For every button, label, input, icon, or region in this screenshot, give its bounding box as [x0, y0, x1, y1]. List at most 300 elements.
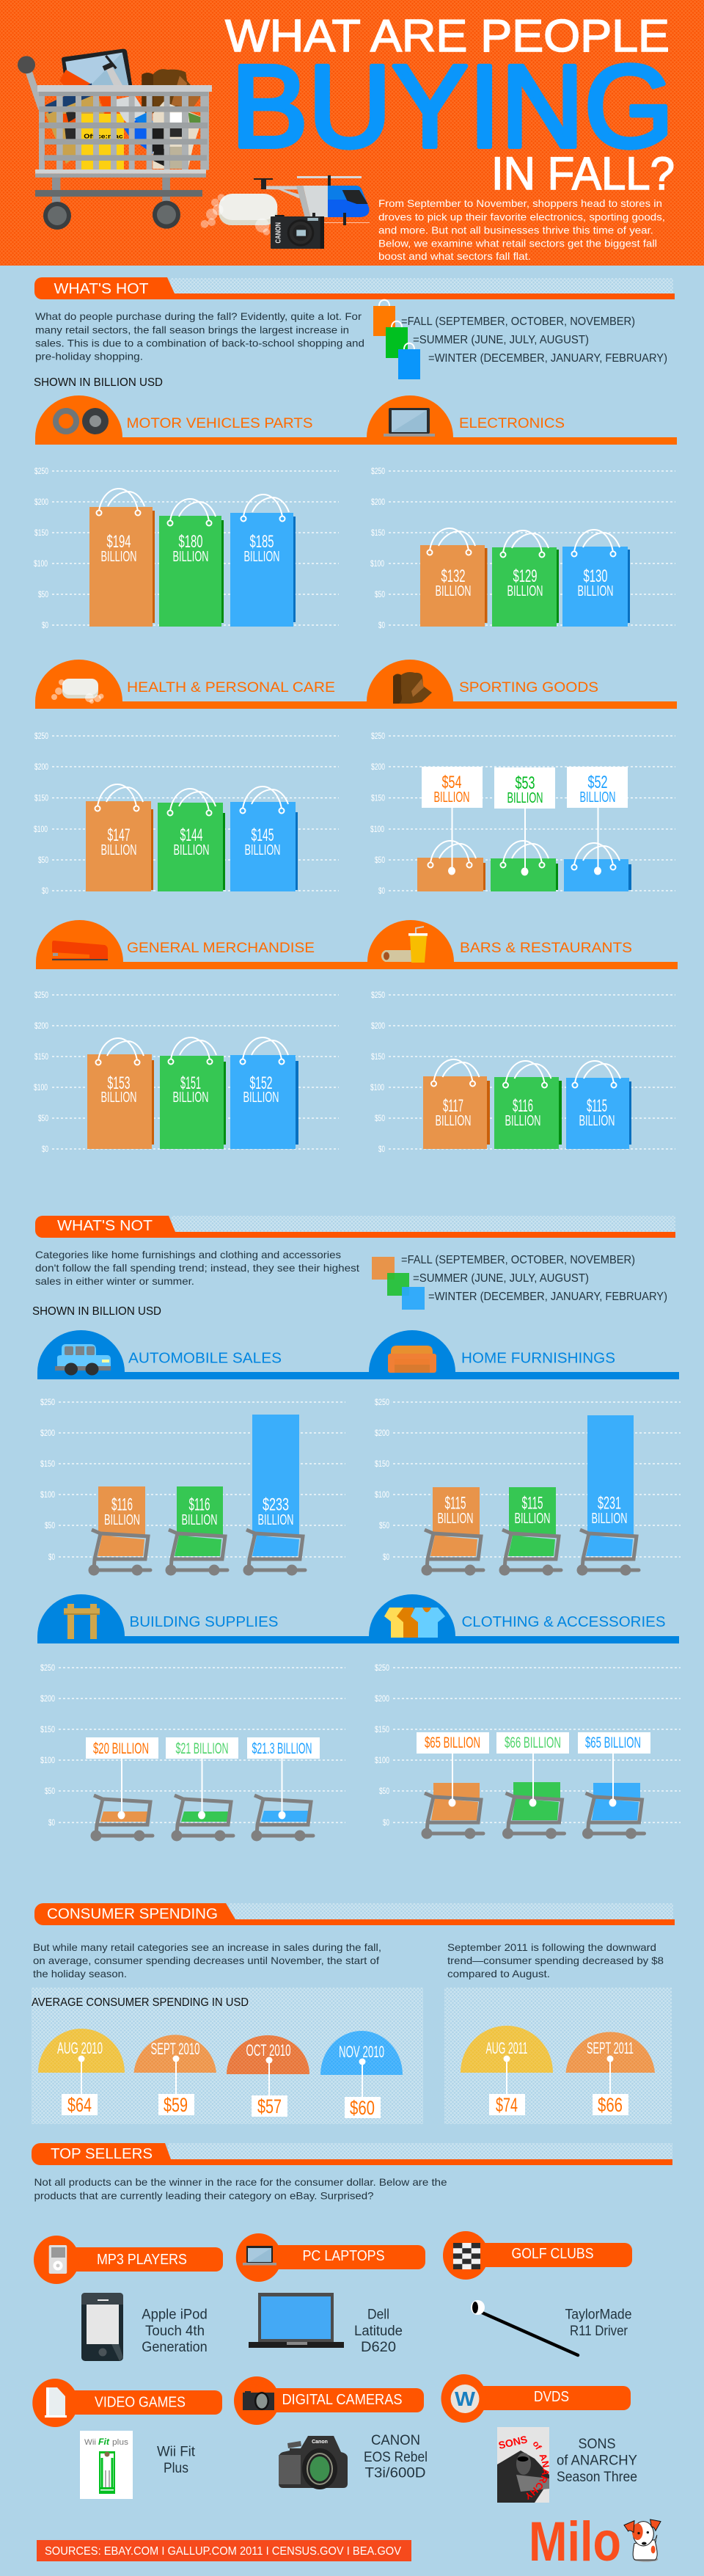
chart: electronics: $50: [375, 589, 385, 599]
chart: general merchandise: $50: [38, 1113, 48, 1123]
dome: nov 2010: NOV 2010: [339, 2043, 384, 2061]
bag: winter: $115: [587, 1096, 607, 1116]
what's not intro text: Categories like home furnishings and clothing and accessories: [35, 1249, 341, 1260]
title: what are people: WHAT ARE PEOPLE: [225, 11, 670, 62]
pill: digital cameras: DIGITAL CAMERAS: [282, 2392, 402, 2408]
top sellers intro text: products that are currently leading their category on eBay. Surprised?: [34, 2189, 374, 2201]
callout: $52 billion: [567, 767, 628, 875]
icon: stapler: [52, 941, 108, 960]
bag: fall: $132: [441, 566, 465, 586]
chart: health and personal care: $250: [34, 731, 48, 741]
dome: oct 2010: OCT 2010: [246, 2041, 290, 2059]
callout: $54 billion: BILLION: [434, 789, 469, 806]
pill: mp3 players: [34, 2236, 223, 2284]
sources bar: [37, 2540, 411, 2561]
callout: $52 billion: BILLION: [579, 789, 616, 806]
pill: video games: [32, 2379, 222, 2427]
icon: gear and tire: [54, 408, 109, 434]
what's not intro text: don't follow the fall spending trend; instead, they see their highest: [35, 1262, 359, 1274]
chart: home furnishings: $150: [375, 1459, 389, 1469]
icon: soap: [51, 679, 104, 704]
chart: clothing and accessories: $100: [375, 1755, 389, 1765]
chart: sporting goods: $250: [371, 731, 385, 741]
category band row 4: [37, 1330, 679, 1379]
consumer spending text left: the holiday season.: [33, 1968, 127, 1980]
category band row 1: [35, 395, 677, 445]
cart: winter: $65 BILLION: [585, 1734, 641, 1751]
bag: winter: $130: [584, 566, 607, 586]
product: taylormade driver: TaylorMade: [565, 2307, 632, 2323]
product: dell latitude: Latitude: [354, 2324, 403, 2339]
product: canon eos rebel: CANON: [371, 2433, 420, 2448]
bag: winter: [564, 843, 631, 891]
product: wii fit plus: Wii: [84, 2438, 96, 2447]
bag: fall: BILLION: [101, 549, 136, 565]
cart: fall: [88, 1486, 150, 1576]
product: canon eos rebel: Canon: [312, 2440, 328, 2445]
legend: seasons with squares: =SUMMER (JUNE, JULY, AUGUST): [413, 1272, 589, 1285]
logo: milo wordmark: Milo: [529, 2511, 621, 2573]
bag: winter: [230, 787, 298, 891]
chart: building supplies: $150: [40, 1724, 55, 1734]
caption: shown in billion usd: SHOWN IN BILLION USD: [32, 1305, 161, 1318]
chart: health and personal care: $50: [38, 855, 48, 865]
dome: aug 2011: [461, 2026, 553, 2116]
bag: winter: [230, 1037, 298, 1149]
bag: fall: [417, 841, 485, 891]
what's hot intro text: What do people purchase during the fall? Evidently, quite a lot. For: [35, 310, 362, 322]
callout: $54 billion: [422, 767, 483, 875]
product: ipod touch: [81, 2293, 208, 2361]
chart: home furnishings: $200: [375, 1428, 389, 1438]
callout: $53 billion: BILLION: [507, 790, 543, 806]
chart: clothing and accessories: $250: [375, 1663, 389, 1673]
cart: summer: BILLION: [515, 1511, 550, 1527]
legend: seasons with bags: =FALL (SEPTEMBER, OCTOBER, NOVEMBER): [401, 315, 635, 328]
section banner: what's not: WHAT'S NOT: [57, 1218, 153, 1234]
section banner: what's hot: WHAT'S HOT: [54, 281, 148, 297]
heading: health and personal care: HEALTH & PERSONAL CARE: [127, 680, 335, 696]
bag: fall: $153: [107, 1073, 131, 1093]
chart: home furnishings: $50: [379, 1520, 389, 1530]
chart: bars and restaurants: $200: [371, 1021, 385, 1031]
chart: general merchandise: $250: [34, 990, 48, 1000]
chart: motor vehicles parts: $150: [34, 528, 48, 538]
cart: fall: $20 BILLION: [93, 1740, 149, 1757]
chart: building supplies: $250: [40, 1663, 55, 1673]
icon: shirts: [384, 1608, 445, 1638]
heading: automobile sales: AUTOMOBILE SALES: [128, 1350, 282, 1366]
cart: fall: BILLION: [104, 1512, 140, 1528]
title: in fall: IN FALL?: [491, 148, 675, 200]
bag: summer: [160, 1037, 226, 1149]
cart: winter: $231: [598, 1494, 621, 1513]
consumer spending text right: September 2011 is following the downward: [447, 1941, 656, 1953]
cart: fall: $65 BILLION: [425, 1734, 480, 1751]
callout: $54 billion: $54: [441, 773, 462, 792]
chart: clothing and accessories: $0: [383, 1817, 389, 1828]
chart: motor vehicles parts: $250: [34, 466, 48, 476]
section banner: consumer spending: [34, 1903, 675, 1925]
cart: fall: BILLION: [437, 1511, 474, 1527]
heading: motor vehicles parts: MOTOR VEHICLES PARTS: [126, 416, 312, 431]
bag: summer: $144: [180, 825, 202, 845]
cart: winter: $21.3 BILLION: [252, 1740, 312, 1757]
intro text: and more. But not all businesses thrive this time of year.: [378, 225, 653, 236]
illustration: helicopter, soap and camera: CANON: [275, 222, 283, 244]
logo: milo dog: [624, 2520, 661, 2562]
legend: seasons with bags: =WINTER (DECEMBER, JANUARY, FEBRUARY): [428, 352, 667, 365]
bag: fall: [87, 1038, 154, 1149]
bag: winter: [566, 1061, 631, 1149]
dome: sept 2011: $66: [598, 2094, 623, 2116]
section banner: what's not: [35, 1216, 675, 1238]
chart: automobile sales: $0: [48, 1552, 55, 1562]
cart: summer: $116: [189, 1495, 210, 1514]
bag: summer: [158, 789, 225, 891]
bag: winter: BILLION: [245, 842, 280, 858]
chart: bars and restaurants: $150: [371, 1051, 385, 1062]
bag: winter: [562, 530, 630, 627]
chart: automobile sales: $100: [40, 1489, 55, 1500]
chart: bars and restaurants: $250: [371, 990, 385, 1000]
intro text: From September to November, shoppers head to stores in: [378, 197, 662, 209]
icon: dvd disc logo: [450, 2385, 480, 2413]
pill: digital cameras: [234, 2376, 424, 2425]
chart: automobile sales: $50: [45, 1520, 55, 1530]
callout: $53 billion: $53: [515, 773, 535, 793]
consumer spending text left: [33, 1941, 381, 1980]
chart: general merchandise: [34, 990, 339, 1154]
bag: fall: $147: [107, 825, 131, 845]
heading: clothing and accessories: CLOTHING & ACCESSORIES: [462, 1614, 666, 1630]
category band row 2: [35, 660, 677, 709]
dome: aug 2010: [38, 2029, 125, 2116]
chart: sporting goods: $0: [378, 886, 385, 896]
chart: building supplies: [40, 1663, 345, 1842]
cart: summer: [499, 1487, 561, 1576]
consumer spending text left: on average, consumer spending decreases until November, the start of: [33, 1955, 379, 1966]
dome: sept 2010: [133, 2035, 216, 2116]
caption: shown in billion usd: SHOWN IN BILLION USD: [34, 376, 163, 389]
product: canon eos rebel: EOS Rebel: [364, 2450, 428, 2465]
cart: winter: [243, 1415, 305, 1576]
dome: sept 2010: $59: [164, 2094, 188, 2116]
header panel: [0, 0, 704, 266]
bag: summer: $180: [179, 532, 202, 552]
what's not intro text: [35, 1249, 359, 1287]
chart: bars and restaurants: [370, 990, 675, 1154]
consumer spending text left: But while many retail categories see an increase in sales during the fall,: [33, 1941, 381, 1953]
cart: summer: [166, 1737, 238, 1842]
chart: general merchandise: $0: [42, 1144, 48, 1154]
chart: home furnishings: $250: [375, 1397, 389, 1407]
product: ipod touch: Apple iPod: [142, 2307, 208, 2323]
icon: tablet: [384, 408, 435, 437]
product: sons of anarchy: SONS: [578, 2437, 616, 2452]
cart: fall: [417, 1732, 489, 1839]
chart: sporting goods: [370, 731, 675, 896]
chart: health and personal care: [34, 731, 339, 896]
icon: ipod: [49, 2245, 67, 2274]
section banner: what's hot: [34, 277, 675, 299]
intro text: boost and what sectors fall flat.: [378, 250, 531, 262]
legend: seasons with squares: [372, 1254, 667, 1310]
chart: motor vehicles parts: [34, 466, 339, 630]
product: ipod touch: Generation: [142, 2340, 208, 2355]
cart: winter: [576, 1415, 639, 1576]
heading: general merchandise: GENERAL MERCHANDISE: [127, 941, 315, 956]
heading: sporting goods: SPORTING GOODS: [459, 680, 598, 696]
chart: building supplies: $200: [40, 1693, 55, 1704]
cart: summer: $66 BILLION: [505, 1734, 561, 1751]
top sellers intro text: Not all products can be the winner in the race for the consumer dollar. Below are the: [34, 2176, 447, 2188]
chart: clothing and accessories: $200: [375, 1693, 389, 1704]
chart: general merchandise: $200: [34, 1021, 48, 1031]
chart: automobile sales: $150: [40, 1459, 55, 1469]
dome: sept 2011: SEPT 2011: [587, 2039, 634, 2057]
product: sons of anarchy: ANARCHY: [527, 2455, 549, 2500]
chart: sporting goods: $200: [371, 762, 385, 772]
chart: sporting goods: $100: [370, 824, 384, 834]
what's hot intro text: many retail sectors, the fall season brings the largest increase in: [35, 324, 349, 336]
cart: summer: [496, 1732, 569, 1839]
product: taylormade driver: [471, 2300, 632, 2355]
section banner: top sellers: TOP SELLERS: [51, 2146, 153, 2162]
cart: summer: BILLION: [182, 1512, 217, 1528]
chart: electronics: $200: [371, 497, 385, 507]
icon: car: [55, 1344, 111, 1375]
dome: oct 2010: [227, 2035, 309, 2117]
panel: average consumer spending 2010: [32, 1988, 423, 2124]
chart: electronics: $0: [378, 620, 385, 630]
bag: summer: BILLION: [173, 549, 208, 565]
pill: mp3 players: MP3 PLAYERS: [97, 2252, 187, 2268]
bag: summer: [491, 841, 558, 891]
panel: average consumer spending 2011: [444, 1988, 672, 2124]
product: wii fit plus: [80, 2431, 196, 2499]
sources bar: SOURCES: EBAY.COM I GALLUP.COM 2011 I CENSUS.GOV I BEA.GOV: [45, 2545, 402, 2558]
bag: summer: [492, 530, 559, 627]
pill: golf clubs: [443, 2231, 632, 2280]
bag: fall: [86, 784, 153, 891]
bag: fall: BILLION: [436, 1113, 471, 1129]
cart: winter: $233: [263, 1495, 289, 1514]
legend: seasons with bags: [373, 300, 667, 379]
chart: electronics: $250: [371, 466, 385, 476]
bag: winter: BILLION: [579, 1113, 615, 1129]
cart: fall: $115: [444, 1494, 466, 1513]
chart: health and personal care: $0: [42, 886, 48, 896]
cart: summer: $115: [522, 1494, 543, 1513]
intro text: droves to pick up their favorite electronics, sporting goods,: [378, 211, 665, 223]
product: canon eos rebel: [279, 2433, 428, 2489]
what's hot intro text: [35, 310, 364, 362]
intro text: Below, we examine what retail sectors get the biggest fall: [378, 238, 657, 249]
title: buying: BUYING: [231, 40, 674, 172]
what's not intro text: sales in either winter or summer.: [35, 1275, 194, 1287]
illustration: helicopter, soap and camera: [201, 175, 370, 249]
product: canon eos rebel: T3i/600D: [365, 2466, 425, 2481]
what's hot intro text: sales. This is due to a combination of back-to-school shopping and: [35, 337, 364, 349]
chart: home furnishings: $100: [375, 1489, 389, 1500]
chart: electronics: $100: [370, 558, 384, 569]
icon: baseball glove: [393, 672, 432, 704]
section banner: top sellers: [32, 2143, 672, 2165]
chart: bars and restaurants: $50: [375, 1113, 385, 1123]
bag: summer: [159, 499, 224, 627]
pill: video games: VIDEO GAMES: [95, 2395, 186, 2411]
dome: oct 2010: $57: [257, 2095, 282, 2117]
bag: winter: BILLION: [578, 583, 613, 599]
chart: home furnishings: $0: [383, 1552, 389, 1562]
icon: burrito and soda: [381, 927, 428, 963]
chart: motor vehicles parts: $100: [34, 558, 48, 569]
chart: general merchandise: $100: [34, 1082, 48, 1092]
pill: pc laptops: PC LAPTOPS: [302, 2248, 384, 2264]
product: sons of anarchy: of: [530, 2439, 544, 2452]
product: wii fit plus: Wii Fit: [157, 2445, 196, 2459]
cart: fall: [421, 1487, 483, 1576]
bag: fall: $194: [107, 532, 131, 552]
chart: bars and restaurants: $0: [378, 1144, 385, 1154]
heading: bars and restaurants: BARS & RESTAURANTS: [460, 941, 632, 956]
chart: building supplies: $100: [40, 1755, 55, 1765]
illustration: shopping cart with products: [18, 49, 212, 230]
chart: electronics: $150: [371, 528, 385, 538]
dome: aug 2011: AUG 2011: [485, 2039, 528, 2057]
bag: fall: [423, 1059, 490, 1149]
what's hot intro text: pre-holiday shopping.: [35, 351, 143, 362]
chart: motor vehicles parts: $200: [34, 497, 48, 507]
cart: winter: BILLION: [591, 1511, 628, 1527]
intro text: [378, 197, 665, 262]
bag: summer: $129: [513, 566, 537, 586]
icon: sofa: [388, 1346, 436, 1373]
category band row 3: [36, 920, 678, 969]
cart: summer: [166, 1486, 227, 1576]
bag: fall: [420, 528, 487, 627]
dome: nov 2010: [320, 2031, 403, 2119]
callout: $53 billion: [494, 767, 555, 876]
chart: sporting goods: $150: [371, 792, 385, 803]
bag: summer: $151: [180, 1073, 201, 1093]
chart: clothing and accessories: $150: [375, 1724, 389, 1734]
product: sons of anarchy: SONS: [497, 2433, 529, 2451]
icon: checkered flag: [453, 2243, 480, 2269]
chart: sporting goods: $50: [375, 855, 385, 865]
chart: bars and restaurants: $100: [370, 1082, 384, 1092]
product: wii fit plus: plus: [112, 2438, 129, 2447]
chart: automobile sales: [40, 1397, 345, 1576]
chart: clothing and accessories: [375, 1663, 681, 1839]
bag: summer: $116: [513, 1096, 533, 1116]
legend: seasons with bags: =SUMMER (JUNE, JULY, AUGUST): [413, 334, 589, 346]
cart: fall: [86, 1737, 158, 1842]
product: taylormade driver: R11 Driver: [570, 2324, 628, 2339]
product: wii fit plus: Fit: [98, 2437, 110, 2447]
bag: winter: $145: [251, 825, 274, 845]
dome: sept 2010: SEPT 2010: [151, 2040, 199, 2058]
dome: sept 2011: [566, 2032, 655, 2116]
bag: fall: [89, 489, 155, 627]
product: dell latitude: Dell: [367, 2307, 389, 2323]
chart: health and personal care: $200: [34, 762, 48, 772]
chart: automobile sales: $200: [40, 1428, 55, 1438]
bag: summer: [494, 1061, 562, 1149]
bag: winter: $185: [249, 532, 274, 552]
chart: health and personal care: $150: [34, 792, 48, 803]
chart: motor vehicles parts: $50: [38, 589, 48, 599]
icon: camera: [243, 2391, 274, 2410]
product: dell latitude: D620: [361, 2340, 396, 2355]
chart: home furnishings: [375, 1397, 681, 1576]
product: sons of anarchy: of ANARCHY: [557, 2453, 637, 2468]
bag: fall: $117: [443, 1096, 463, 1116]
heading: building supplies: BUILDING SUPPLIES: [129, 1614, 279, 1630]
consumer spending text right: compared to August.: [447, 1968, 550, 1980]
pill: pc laptops: [236, 2233, 425, 2282]
chart: clothing and accessories: $50: [379, 1786, 389, 1796]
chart: motor vehicles parts: $0: [42, 620, 48, 630]
pill: dvds: DVDS: [534, 2389, 569, 2405]
heading: electronics: ELECTRONICS: [459, 416, 565, 431]
top sellers intro text: [34, 2176, 447, 2201]
bag: fall: BILLION: [101, 842, 136, 858]
bag: winter: [230, 495, 296, 627]
product: ipod touch: Touch 4th: [145, 2324, 205, 2339]
icon: dvd disc logo: W: [455, 2387, 476, 2410]
chart: general merchandise: $150: [34, 1051, 48, 1062]
chart: electronics: [370, 466, 675, 630]
cart: fall: $116: [111, 1495, 133, 1514]
consumer spending text right: trend—consumer spending decreased by $8: [447, 1955, 664, 1966]
bag: summer: BILLION: [507, 583, 543, 599]
dome: nov 2010: $60: [350, 2097, 375, 2119]
callout: $52 billion: $52: [588, 773, 607, 792]
bag: winter: BILLION: [243, 549, 280, 565]
caption: average consumer spending: AVERAGE CONSUMER SPENDING IN USD: [32, 1996, 249, 2009]
chart: building supplies: $0: [48, 1817, 55, 1828]
product: wii fit plus: Plus: [164, 2461, 188, 2476]
dome: aug 2010: $64: [67, 2094, 92, 2116]
dome: aug 2010: AUG 2010: [57, 2039, 103, 2057]
cart: winter: [247, 1737, 320, 1842]
chart: health and personal care: $100: [34, 824, 48, 834]
bag: summer: BILLION: [173, 842, 210, 858]
product: dell latitude: [249, 2293, 403, 2355]
pill: golf clubs: GOLF CLUBS: [512, 2246, 594, 2262]
pill: dvds: [441, 2374, 631, 2423]
cart: winter: [578, 1732, 650, 1839]
legend: seasons with squares: =WINTER (DECEMBER, JANUARY, FEBRUARY): [428, 1291, 667, 1303]
bag: winter: $152: [249, 1073, 273, 1093]
category band row 5: [37, 1594, 679, 1643]
illustration: shopping cart with products: Office:mac: [84, 133, 123, 140]
bag: winter: BILLION: [243, 1090, 279, 1106]
bag: summer: BILLION: [173, 1090, 208, 1106]
icon: laptop: [243, 2246, 276, 2266]
chart: automobile sales: $250: [40, 1397, 55, 1407]
cart: summer: $21 BILLION: [176, 1740, 229, 1757]
product: sons of anarchy: [497, 2427, 637, 2503]
cart: winter: BILLION: [258, 1512, 293, 1528]
bag: fall: BILLION: [101, 1090, 136, 1106]
icon: wii console: [45, 2387, 67, 2418]
legend: seasons with squares: =FALL (SEPTEMBER, OCTOBER, NOVEMBER): [401, 1254, 635, 1266]
dome: aug 2011: $74: [496, 2094, 518, 2116]
product: sons of anarchy: Season Three: [557, 2470, 637, 2485]
